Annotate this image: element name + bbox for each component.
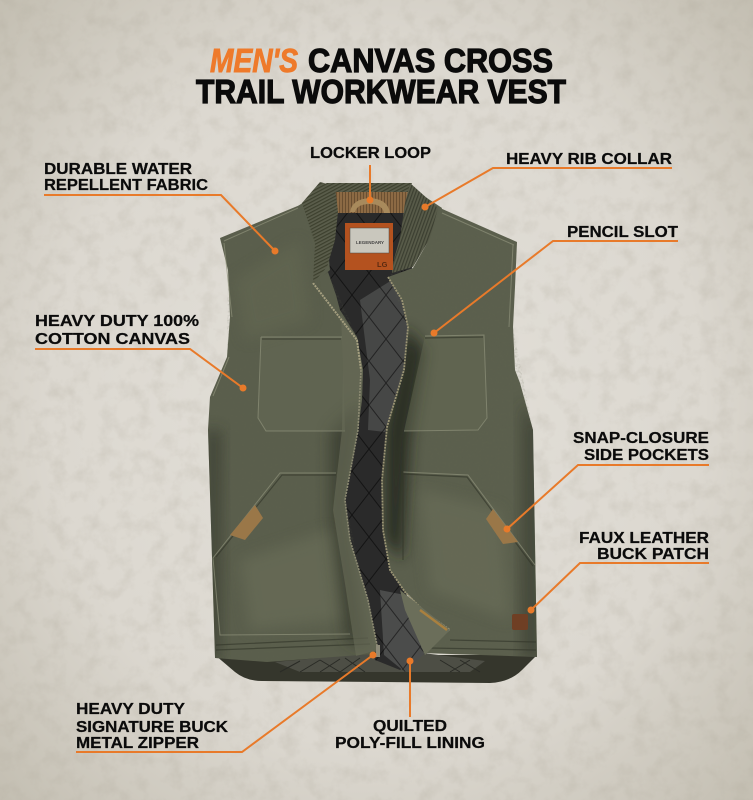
callout: heavy rib collar [422, 151, 672, 210]
top-stitching on shoulders and armholes [213, 208, 514, 396]
callout: metal zipper [76, 652, 376, 752]
callout: snap-closure side pockets: SNAP-CLOSURE [573, 430, 709, 447]
title: MEN'S [210, 42, 298, 79]
callout: metal zipper: METAL ZIPPER [76, 735, 199, 752]
lighter quilted lining patch [360, 280, 414, 432]
callout: durable water repellent fabric [44, 161, 278, 254]
callout: pencil slot [430, 224, 678, 336]
callout: metal zipper: SIGNATURE BUCK [76, 719, 228, 736]
callout: pencil slot: PENCIL SLOT [567, 224, 678, 241]
callout: quilted poly-fill lining: QUILTED [373, 718, 447, 735]
left rib collar [302, 182, 338, 283]
lower left pocket [213, 473, 350, 635]
right zipper tape [382, 277, 450, 630]
title: CANVAS CROSS [308, 42, 553, 79]
callout: durable water repellent fabric: DURABLE WATER [44, 161, 192, 178]
right fabric shading [385, 327, 540, 660]
back hem [215, 655, 537, 683]
callout: quilted poly-fill lining [335, 658, 485, 752]
left leather patch [230, 505, 263, 540]
right rib collar [392, 183, 438, 273]
callout: heavy duty cotton canvas: COTTON CANVAS [35, 331, 190, 348]
bottom buck patch [512, 614, 528, 630]
callout: faux leather buck patch [528, 530, 709, 614]
back collar corduroy [332, 191, 408, 213]
callout: faux leather buck patch: FAUX LEATHER [579, 530, 709, 547]
callout: quilted poly-fill lining: POLY-FILL LINING [335, 735, 485, 752]
left placket [333, 315, 378, 656]
callout: locker loop: LOCKER LOOP [310, 145, 431, 162]
lower right pocket [403, 472, 535, 565]
upper left chest pocket [258, 337, 345, 431]
lower lighter lining [380, 590, 432, 672]
callout: metal zipper: HEAVY DUTY [76, 701, 185, 718]
title: TRAIL WORKWEAR VEST [196, 73, 566, 110]
hem stitching [216, 638, 536, 650]
title [196, 42, 566, 110]
bottom lining strip [275, 653, 485, 672]
callout: durable water repellent fabric: REPELLENT FABRIC [44, 177, 208, 194]
callout: heavy duty cotton canvas: HEAVY DUTY 100% [35, 313, 199, 330]
callout: faux leather buck patch: BUCK PATCH [597, 546, 709, 563]
interior quilted lining [320, 205, 430, 670]
neck label: LG [377, 260, 388, 269]
callout: snap-closure side pockets: SIDE POCKETS [584, 447, 709, 464]
upper right chest pocket [404, 335, 487, 431]
neck label [345, 223, 393, 270]
callout: snap-closure side pockets [504, 430, 709, 532]
neck label: LEGENDARY [356, 240, 384, 245]
right placket [400, 590, 450, 655]
shoulder fabric under collar [298, 190, 442, 285]
zipper slider [376, 645, 380, 657]
vest photo illustration [205, 182, 540, 683]
canvas texture [208, 205, 378, 662]
callout: heavy rib collar: HEAVY RIB COLLAR [506, 151, 672, 168]
back collar rib [326, 183, 412, 192]
right leather patch [486, 509, 518, 544]
locker loop [350, 198, 390, 213]
left fabric shading [208, 418, 360, 658]
left zipper tape [313, 283, 361, 370]
callout: heavy duty cotton canvas [35, 313, 246, 392]
right vest panel [382, 208, 537, 657]
left vest panel [208, 205, 378, 662]
callout: locker loop [310, 145, 431, 204]
